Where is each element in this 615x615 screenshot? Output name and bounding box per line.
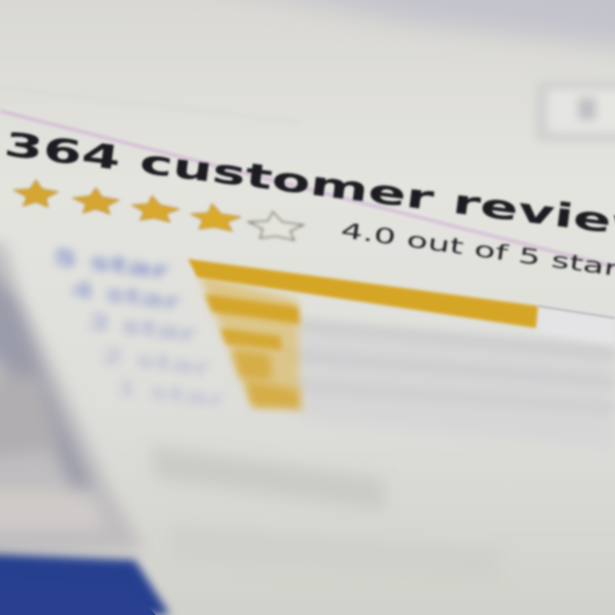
left foreground object <box>0 235 145 560</box>
label 1 star: 1 star <box>113 375 226 413</box>
rating bar tracks <box>285 318 615 414</box>
top track remainder <box>536 308 615 345</box>
blurred text block <box>150 445 500 580</box>
top lavender band <box>170 0 615 50</box>
star breakdown labels <box>51 245 226 413</box>
star 5 empty <box>249 212 303 240</box>
label 4 star: 4 star <box>69 277 182 315</box>
top-right button <box>535 80 615 142</box>
bar funnel connector <box>198 272 300 408</box>
star rating row <box>14 180 303 240</box>
pink reflection line <box>0 111 615 267</box>
star 4 <box>191 204 241 231</box>
star 3 <box>132 196 179 222</box>
bar: 3 star <box>220 328 282 350</box>
label 2 star: 2 star <box>99 343 212 381</box>
faint rule above heading <box>0 88 300 122</box>
bottom blue element <box>0 553 170 615</box>
track top edge line <box>538 306 615 318</box>
bar: 5 star <box>188 259 538 328</box>
rating track area shading <box>300 325 615 450</box>
bar: 1 star <box>245 380 302 410</box>
label 5 star: 5 star <box>51 245 171 283</box>
star 1 <box>14 180 58 207</box>
label 3 star: 3 star <box>85 309 198 347</box>
bar: 4 star <box>205 294 300 324</box>
bar: 2 star <box>232 350 272 380</box>
star 2 <box>73 188 119 214</box>
